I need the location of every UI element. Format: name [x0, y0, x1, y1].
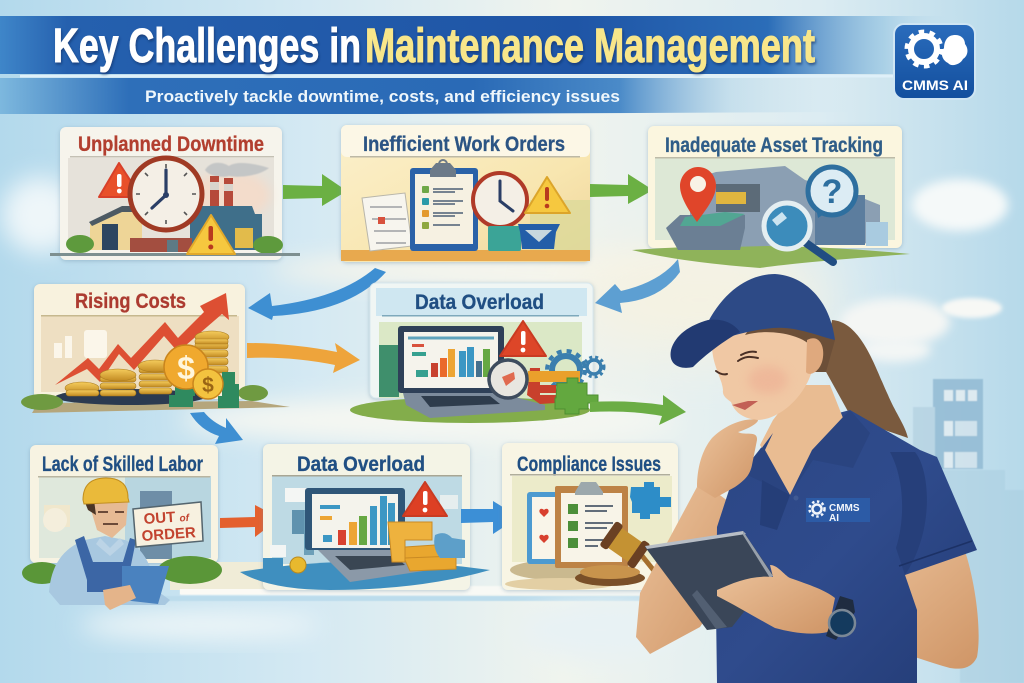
shirt — [716, 385, 977, 683]
icon: location pin — [680, 167, 716, 222]
technician woman — [636, 274, 979, 683]
panel: data overload lower — [240, 444, 490, 590]
icon: gears — [547, 351, 604, 389]
chart: laptop bars — [431, 347, 490, 377]
patch text: CMMS — [829, 503, 860, 514]
icon: blue clipboard — [122, 566, 169, 604]
icon: bushes — [21, 385, 268, 410]
icon: teal box and tray — [488, 224, 560, 251]
icon: clock — [130, 158, 202, 230]
icon: cash bundles — [169, 372, 239, 408]
heading: Data Overload — [415, 290, 544, 314]
icon: yellow warning triangle — [187, 215, 235, 254]
panel: data overload upper — [350, 283, 604, 423]
header banner — [0, 16, 960, 114]
hand at chin — [697, 419, 758, 498]
icon: paper stack — [362, 193, 412, 251]
icon: big dollar coin: $ — [177, 350, 195, 386]
icon: factory — [89, 163, 269, 252]
ponytail hair — [825, 320, 908, 438]
neck — [760, 385, 843, 495]
panel: lack of skilled labor — [22, 445, 270, 610]
arrow: orange to data overload — [247, 343, 360, 373]
icon: coin stacks — [65, 331, 229, 396]
icon: coin — [290, 557, 306, 573]
title: Key Challenges in — [53, 20, 361, 73]
icon: blue blob — [434, 533, 465, 558]
icon: question bubble — [808, 167, 856, 218]
panel: inefficient work orders — [341, 125, 590, 262]
face — [712, 325, 815, 420]
heading: Compliance Issues — [517, 452, 661, 476]
icon: warning triangle — [403, 482, 447, 516]
arrow: blue curved to data overload — [595, 259, 680, 313]
heading: Rising Costs — [75, 289, 186, 313]
icon: gavel — [575, 521, 655, 586]
ground — [632, 246, 910, 268]
chart: laptop bars — [338, 496, 395, 545]
shirt logo patch — [806, 498, 870, 524]
background building — [140, 491, 172, 559]
icon: clipboard checklist — [555, 482, 628, 568]
eyes and mouth — [716, 352, 758, 374]
heading: Data Overload — [297, 452, 425, 476]
arrow: green to inefficient work orders — [283, 174, 347, 206]
icon: laptop — [305, 488, 430, 582]
icon: clipboard checklist — [410, 160, 478, 251]
out of order sign: OUT of — [143, 508, 191, 528]
icon: clock — [473, 173, 527, 227]
icon: machine — [666, 166, 888, 250]
tablet — [645, 531, 773, 630]
watch — [826, 596, 855, 640]
icon: green puzzle piece — [555, 378, 598, 414]
heading: Unplanned Downtime — [78, 132, 264, 156]
icon: red and orange blocks — [527, 368, 580, 404]
arrow: orange-red to data overload — [220, 505, 280, 537]
icon: red warning triangle — [99, 163, 141, 197]
ground — [350, 397, 590, 423]
ground — [32, 401, 290, 413]
arrow: green to inadequate asset tracking — [590, 174, 653, 204]
right collar — [790, 410, 870, 495]
heading: Lack of Skilled Labor — [42, 452, 203, 476]
icon: blue puzzle piece — [630, 482, 671, 519]
shirt logo patch: AI — [829, 513, 839, 524]
panel: rising costs — [21, 284, 290, 413]
icon: laptop — [398, 326, 545, 418]
icon: brain — [942, 35, 967, 65]
out of order sign: ORDER — [141, 524, 196, 545]
heading: Inadequate Asset Tracking — [665, 133, 883, 157]
icon: gauge — [489, 360, 527, 398]
icon: back checklist tablet — [527, 492, 563, 564]
hair at temple — [745, 325, 835, 372]
left forearm — [636, 487, 740, 654]
worker — [49, 478, 170, 610]
icon: gear — [907, 32, 941, 66]
ear — [806, 338, 823, 374]
icon: big dollar coin — [164, 345, 208, 389]
arrow: blue to compliance issues — [461, 501, 519, 534]
icon: boxes — [388, 522, 456, 571]
icon: bushes — [22, 556, 222, 584]
right arm — [834, 548, 979, 669]
icon: bushes — [66, 235, 283, 254]
ground — [240, 561, 490, 590]
subtitle: Proactively tackle downtime, costs, and efficiency issues — [145, 87, 620, 106]
panel: unplanned downtime — [50, 127, 300, 260]
icon: magnifier — [764, 203, 833, 262]
icon: warning triangle — [500, 321, 546, 356]
out of order sign — [133, 502, 203, 547]
logo text: CMMS AI — [902, 78, 968, 93]
logo: CMMS AI — [894, 24, 975, 99]
heading: Inefficient Work Orders — [363, 132, 565, 156]
icon: small dollar coin: $ — [202, 374, 214, 397]
background skyline — [913, 379, 1024, 683]
icon: hard hat — [83, 478, 129, 504]
hand on tablet — [717, 565, 835, 634]
title highlight: Maintenance Management — [365, 20, 815, 73]
panel: inadequate asset tracking — [632, 126, 910, 268]
chart: rising red trend arrow — [55, 293, 229, 385]
icon: question bubble: ? — [822, 173, 842, 211]
placket — [760, 480, 790, 530]
cap — [708, 274, 835, 345]
icon: small dollar coin — [193, 369, 223, 399]
left collar — [743, 433, 790, 495]
arrow: green to technician — [590, 395, 686, 425]
arrow: blue down to lack of skilled labor — [190, 412, 243, 444]
arrow: blue curved to rising costs — [248, 268, 386, 320]
panel: compliance issues — [502, 443, 678, 590]
icon: gear — [810, 502, 824, 516]
icon: warning triangle — [525, 177, 570, 213]
